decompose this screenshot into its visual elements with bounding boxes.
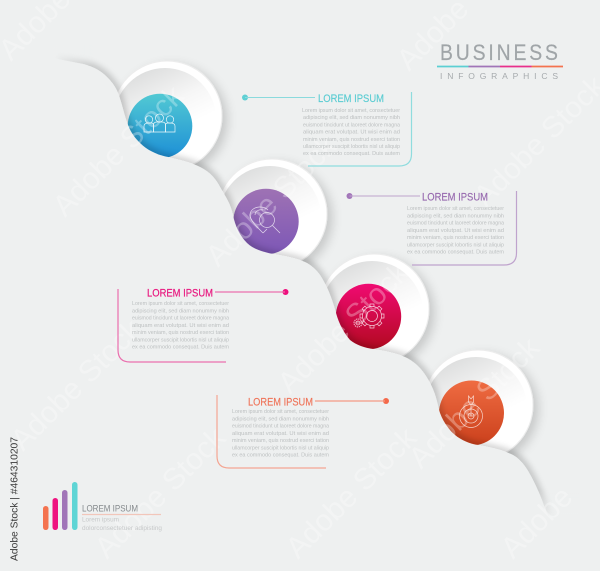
- tail fade top-left: [53, 45, 93, 65]
- orange heading: LOREM IPSUM: [248, 396, 313, 408]
- stock watermarks: [0, 0, 600, 213]
- panel 1: teal callout: [242, 92, 412, 166]
- purple connector and dot: [346, 193, 420, 199]
- legend rule: [82, 514, 161, 516]
- teal body text: Lorem ipsum dolor sit amet, consectetuer: [302, 108, 400, 114]
- tail fade bottom-right: [530, 490, 579, 518]
- pink body text: [132, 301, 230, 350]
- circle 4 with orange blob: [423, 350, 533, 460]
- title block: [437, 41, 563, 81]
- orange body text: aliquam erat volutpat. Ut wisi enim ad: [232, 431, 329, 437]
- purple body text: ullamcorper suscipit lobortis nisl ut aliquip: [407, 242, 504, 248]
- panel 4: orange callout: [217, 395, 389, 468]
- legend text: [82, 516, 162, 532]
- teal connector and dot: [242, 94, 315, 100]
- teal bracket: [308, 92, 412, 166]
- circle 2 with purple blob: [217, 159, 327, 269]
- title rainbow underline: [437, 66, 563, 68]
- icon: people: [144, 114, 175, 132]
- icon: target with arrow: [460, 396, 482, 428]
- pink bracket: [118, 289, 226, 362]
- bottom-right patch hiding surface edge: [549, 518, 579, 571]
- teal heading: LOREM IPSUM: [318, 93, 384, 105]
- circle 3 with pink blob: [319, 254, 429, 364]
- purple bracket: [412, 191, 516, 265]
- icon: gears: [354, 304, 384, 328]
- pink body text: Lorem ipsum dolor sit amet, consectetuer: [132, 301, 229, 307]
- pink heading: LOREM IPSUM: [147, 288, 213, 300]
- lower stock watermarks: Adobe Stock: [200, 129, 344, 273]
- teal body text: adipiscing elit, sed diam nonummy nibh: [303, 115, 400, 121]
- pink body text: euismod tincidunt ut laoreet dolore magna: [132, 316, 229, 322]
- purple body text: euismod tincidunt ut laoreet dolore magna: [407, 220, 504, 226]
- orange bracket: [217, 395, 326, 468]
- orange body text: minim veniam, quis nostrud exerci tation: [232, 438, 329, 444]
- legend text: Lorem ipsum: [82, 516, 119, 524]
- orange body text: ex ea commodo consequat. Duis autem: [232, 452, 330, 458]
- pink body text: minim veniam, quis nostrud exerci tation: [132, 330, 229, 336]
- left patch hiding surface edge: [30, 45, 53, 571]
- heading: BUSINESS: BUSINESS: [440, 41, 558, 65]
- orange body text: [232, 409, 330, 458]
- purple body text: ex ea commodo consequat. Duis autem: [407, 250, 505, 256]
- pink connector and dot: [215, 289, 288, 295]
- legend heading: LOREM IPSUM: [82, 504, 138, 514]
- bar chart icon: [43, 482, 78, 530]
- orange body text: Lorem ipsum dolor sit amet, consectetuer: [232, 409, 329, 415]
- pink body text: aliquam erat volutpat. Ut wisi enim ad: [132, 323, 229, 329]
- purple body text: [407, 206, 505, 256]
- purple body text: aliquam erat volutpat. Ut wisi enim ad: [407, 228, 504, 234]
- circle 1 with blue blob: [112, 61, 222, 171]
- lower stock watermarks: Adobe Stock: [5, 313, 149, 457]
- teal body text: aliquam erat volutpat. Ut wisi enim ad: [303, 130, 400, 136]
- teal body text: ullamcorper suscipit lobortis nisl ut aliquip: [303, 144, 400, 150]
- pink body text: adipiscing elit, sed diam nonummy nibh: [132, 308, 229, 314]
- orange body text: euismod tincidunt ut laoreet dolore magna: [232, 424, 329, 430]
- purple heading: LOREM IPSUM: [422, 192, 488, 204]
- subtitle: INFOGRAPHICS: INFOGRAPHICS: [440, 71, 558, 81]
- stock id caption: Adobe Stock | #464310207: [8, 437, 20, 561]
- pink body text: ullamcorper suscipit lobortis nisl ut aliquip: [132, 337, 229, 343]
- teal body text: ex ea commodo consequat. Duis autem: [303, 151, 401, 157]
- panel 3: pink callout: [118, 288, 288, 362]
- teal body text: [302, 108, 401, 157]
- lower stock watermarks: Adobe Stock: [272, 256, 416, 400]
- purple body text: minim veniam, quis nostrud exerci tation: [407, 235, 504, 241]
- pink body text: ex ea commodo consequat. Duis autem: [132, 344, 230, 350]
- lower stock watermarks: Adobe: [495, 480, 579, 565]
- orange connector and dot: [315, 398, 389, 404]
- teal body text: euismod tincidunt ut laoreet dolore magna: [303, 122, 400, 128]
- orange body text: adipiscing elit, sed diam nonummy nibh: [232, 416, 329, 422]
- lower stock watermarks: Adobe Stock: [89, 421, 233, 565]
- teal body text: minim veniam, quis nostrud exerci tation: [303, 137, 400, 143]
- purple body text: adipiscing elit, sed diam nonummy nibh: [407, 213, 504, 219]
- panel 2: purple callout: [346, 191, 516, 265]
- lower stock watermarks: Adobe Stock: [403, 331, 547, 475]
- icon: pin and magnifier: [250, 207, 280, 233]
- legend text: dolorconsectetuer adipisting: [82, 525, 162, 532]
- orange body text: ullamcorper suscipit lobortis nisl ut aliquip: [232, 445, 329, 451]
- bottom-left legend: [43, 482, 162, 532]
- purple body text: Lorem ipsum dolor sit amet, consectetuer: [407, 206, 504, 212]
- lower stock watermarks: Adobe Stock: [47, 79, 191, 223]
- lower stock watermarks: Adobe Stock: [280, 421, 424, 565]
- scalloped foreground surface: [52, 58, 550, 571]
